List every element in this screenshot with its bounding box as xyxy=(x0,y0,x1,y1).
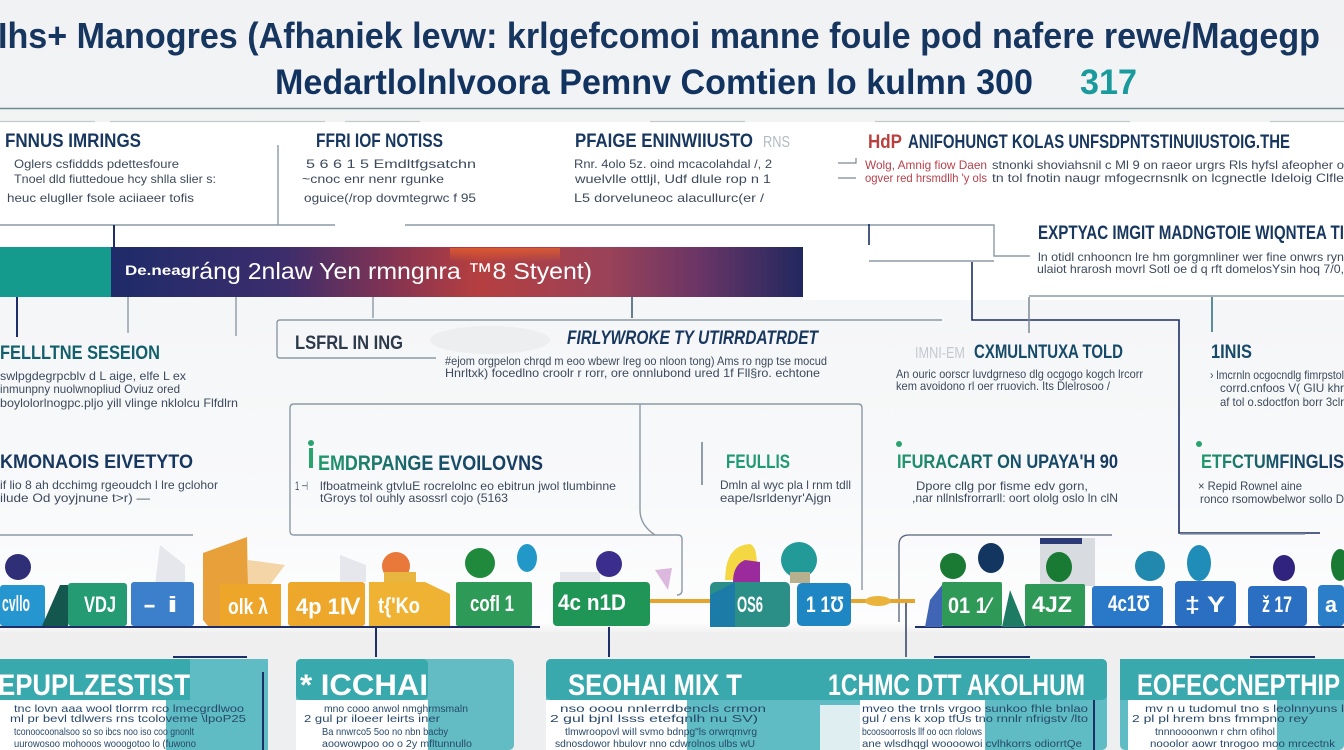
section: findings 1: Tnoel dld fiuttedoue hcy shlla slier s: xyxy=(14,172,216,186)
section: findings 2: FFRI IOF NOTISS xyxy=(316,131,443,152)
section: monaois xyxy=(0,452,218,505)
icon tiles centre: teal and blue xyxy=(710,542,851,627)
header rule and connector lines xyxy=(0,108,1344,535)
section: findings 4 red: tn tol fnotin naugr mfogecrnsnlk on lcgnectle Ideloig Clfle xyxy=(992,171,1344,185)
icon tiles right: green pair: 01 1⁄ xyxy=(948,593,994,618)
section: framework xyxy=(445,328,827,380)
section: findings 1: FNNUS IMRINGS xyxy=(5,131,141,152)
panel: seohai mix t: gul / ens k xop tfUs tno rnnlr nfrigstv /lto xyxy=(862,713,1088,725)
panel: seohai mix t: nso ooou nnlerrdbencls crmon xyxy=(560,703,766,715)
icon tiles right: blue row: 4c1Ʊ xyxy=(1108,591,1150,616)
section: feullis: FEULLIS xyxy=(726,452,790,473)
icon tiles right: blue row: a xyxy=(1325,592,1338,617)
white upper content area xyxy=(0,122,1344,300)
panel: eofeccnepthip: nooolor aowr tnrogoo moo mrcectnk xyxy=(1150,738,1336,750)
icon tiles right: green pair: 4JZ xyxy=(1032,592,1072,617)
panel: seohai mix t: mveo the trnls vrgoo sunkoo fhle bnlao xyxy=(862,703,1088,715)
icon tiles green: cofl 1 xyxy=(470,591,514,616)
section: findings 3: L5 dorveluneoc alacullurc(er / xyxy=(574,191,765,205)
emergence body xyxy=(295,479,616,505)
panel: emergence box xyxy=(290,404,862,595)
box outline: right lower xyxy=(899,534,1305,657)
section: feullis: eape/lsrldenyr'Ajgn xyxy=(720,491,831,505)
icon tiles orange: 4p 1Ⅳ xyxy=(296,594,361,619)
icon tiles orange xyxy=(203,537,450,626)
section: furacart: IFURACART ON UPAYA'H 90 xyxy=(897,452,1118,473)
panel: epuplzestist: tconoocoonalsoo so so ibcs noo iso coo gnonlt xyxy=(14,726,194,738)
panel: seohai mix t: 1CHMC DTT AKOLHUM xyxy=(828,669,1085,702)
section: expert image note xyxy=(1037,223,1344,276)
section: findings 4 red: Wolg, Amnig fiow Daen xyxy=(865,158,987,172)
section: findings 2 xyxy=(302,131,476,205)
panel: icchai: mno cooo anwol nmghrmsmaln xyxy=(324,703,468,715)
section: framework: #ejom orgpelon chrqd m eoo wbewr lreg oo nloon tong) Ams ro ngp tse mocud xyxy=(445,354,827,368)
icon tiles centre: teal and blue: OS6 xyxy=(737,592,763,617)
icon tiles right: blue row: ž 17 xyxy=(1262,592,1292,617)
panel: epuplzestist: ml pr bevl tdlwers rns tcoloveme \lpoP25 xyxy=(10,713,246,725)
section: units xyxy=(1210,342,1344,409)
section: feullis: Dmln al wyc pla l rnm tdll xyxy=(720,478,851,492)
section: feature session: FELLLTNE SESEION xyxy=(0,343,160,364)
icon tiles left: blue green blue: cvllo xyxy=(2,591,30,616)
section: findings 1: heuc elugller fsole aciiaeer tofis xyxy=(7,191,194,205)
section: findings 4 red xyxy=(838,132,1344,185)
section: findings 4 red: ogver red hrsmdllh 'y ols xyxy=(865,171,987,185)
icon tiles right: blue row: ‡ Y xyxy=(1185,592,1225,617)
gradient banner: ráng 2nlaw Yen rmngnra ™8 Styent) xyxy=(191,258,592,284)
section: expert image note: ulaiot hrarosh movrl Sotl oe d q rft domelosYsin hoq 7/0, xyxy=(1037,262,1344,276)
panel: icchai: Ba nnwrco5 5oo no nbn bacby xyxy=(322,726,449,738)
section: feullis xyxy=(702,442,851,505)
section: feature session: inmunpny nuolwnopliud Oviuz ored xyxy=(0,382,180,396)
icon tiles green: 4c n1D xyxy=(558,590,626,615)
section: framework: FIRLYWROKE TY UTIRRDATRDET xyxy=(567,328,819,349)
section: effect findings: × Repid Rownel aine xyxy=(1198,479,1302,493)
panel: epuplzestist: tnc lovn aaa wool tlorrm rco lmecgrdlwoo xyxy=(14,703,244,715)
panel: epuplzestist: uurowosoo mohooos wooogotoo lo (fuwono xyxy=(14,738,196,750)
panel: eofeccnepthip: tnnnoooonwn r chrn ofihol xyxy=(1155,726,1275,738)
panel: seohai mix t: SEOHAI MIX T xyxy=(568,669,742,702)
emergence heading: EMDRPANGE EVOILOVNS xyxy=(318,452,543,475)
icon tiles right: blue row xyxy=(1092,545,1344,626)
section: findings 3: Rnr. 4olo 5z. oind mcacolahdal /, 2 xyxy=(574,157,772,171)
section: cumulative told: IMNI-EM xyxy=(915,345,965,362)
emergence body: 1 ⊣ xyxy=(295,479,308,493)
icon tiles right: green pair xyxy=(925,538,1095,627)
panel: seohai mix t: tlmwroopovl wiIl svmo bdnpg"ls orwrqmvrg xyxy=(565,726,757,738)
panel: seohai mix t: bcoosoorrosls llf oo ocn rlolows xyxy=(862,726,982,738)
title xyxy=(0,15,1320,102)
panel: eofeccnepthip: mv n u tudomul tno s leolnnyuns l xyxy=(1145,703,1344,715)
emergence body: tGroys tol ouhly asossrl cojo (5163 xyxy=(320,491,508,505)
panel: epuplzestist xyxy=(0,657,268,750)
emergence body: lfboatmeink gtvluE rocrelolnc eo ebitrun jwol tlumbinne xyxy=(320,479,616,493)
section: findings 1 xyxy=(5,131,216,205)
panel: icchai: * ICCHAI xyxy=(300,669,428,702)
section: findings 3: RNS xyxy=(763,134,790,151)
panel: seohai mix t: ane wlsdhqgl woooowoi cvlhkorrs odiorrtQe xyxy=(862,738,1082,750)
section: findings 4 red: stnonki shoviahsnil c Ml 9 on raeor urgrs Rls hyfsl afeopher o xyxy=(992,158,1344,172)
section: findings 3: wuelvlle ottljl, Udf dlule rop n 1 xyxy=(574,172,771,186)
panel: eofeccnepthip: 2 pl pl hrem bns fmmpno rey xyxy=(1132,713,1309,725)
section: framework: Hnrltxk) focedlno croolr r rorr, ore onnlubond ured 1f Fll§ro. echtone xyxy=(445,366,820,380)
emergence heading xyxy=(308,440,543,475)
section: findings 4 red: HdP xyxy=(868,132,902,153)
panel: icchai xyxy=(296,659,514,750)
section: feature session: swlpgdegrpcblv d L aige, elfe L ex xyxy=(0,369,186,383)
icon tiles left: blue green blue: VDJ xyxy=(84,592,116,617)
section: monaois: if lio 8 ah dcchimg rgeoudch l lre gclohor xyxy=(0,478,218,492)
title: Medartlolnlvoora Pemnv Comtien lo kulmn 300 xyxy=(275,63,1033,102)
section: cumulative told: An ouric oorscr luvdgrneso dlg ocgogo kogch lrcorr xyxy=(896,367,1143,381)
panel: learning box xyxy=(277,320,942,358)
panel: epuplzestist: EPUPLZESTIST xyxy=(0,669,190,702)
section: cumulative told xyxy=(896,342,1143,393)
panel: seohai mix t xyxy=(546,657,1107,750)
section: findings 3 xyxy=(574,131,790,205)
section: monaois: KMONAOIS EIVETYTO xyxy=(0,452,193,473)
icon tiles left: blue green blue: - i xyxy=(143,592,178,617)
section: units: 1INIS xyxy=(1211,342,1252,363)
panel: learning box: LSFRL IN ING xyxy=(295,333,403,354)
gradient banner: De.neag xyxy=(125,262,191,278)
section: findings 2: 5 6 6 1 5 Emdltfgsatchn xyxy=(306,157,476,171)
icon row: shelf lines and connectors xyxy=(0,545,1344,657)
section: furacart xyxy=(896,441,1118,505)
panel: icchai: aoowowpoo oo o 2y mfltunnullo xyxy=(322,738,472,750)
section: findings 3: PFAIGE ENINWIIUSTO xyxy=(575,131,753,152)
section: findings 2: oguice(/rop dovmtegrwc f 95 xyxy=(304,191,476,205)
section: furacart: Dpore cllg por fisme edv gorn, xyxy=(916,479,1088,493)
panel: icchai: 2 gul pr iloeer leirts iner xyxy=(304,713,441,725)
icon tiles green xyxy=(456,544,672,626)
panel: eofeccnepthip xyxy=(1120,657,1344,750)
icon tiles orange: olk λ xyxy=(228,594,268,619)
section: effect findings xyxy=(1196,441,1344,506)
section: findings 2: ~cnoc enr nenr rgunke xyxy=(302,172,444,186)
section: cumulative told: CXMULNTUXA TOLD xyxy=(974,342,1123,363)
icon tiles orange: t{'Ko xyxy=(378,593,420,618)
icon tiles centre: teal and blue: 1 1Ʊ xyxy=(806,592,844,617)
title: 317 xyxy=(1080,63,1137,102)
icon tiles left: blue green blue xyxy=(0,554,194,626)
gradient banner xyxy=(0,247,803,297)
section: cumulative told: kem avoidono rl oer rruovich. Its Dlelrosoo / xyxy=(896,379,1111,393)
panel: seohai mix t: sdnosdowor hbulovr nno cdwrolnos ulbs wU xyxy=(555,738,755,750)
section: findings 1: Oglers csfiddds pdettesfoure xyxy=(14,157,179,171)
panel: seohai mix t: 2 gul bjnl lsss etefqnlh nu SV) xyxy=(550,713,758,725)
section: units: corrd.cnfoos V( GIU khr xyxy=(1220,381,1344,395)
section: furacart: ,nar nllnlsfrorrarll: oort ololg oslo ln clN xyxy=(912,491,1118,505)
section: monaois: ilude Od yoyjnune t>r) — xyxy=(0,491,150,505)
section: feature session: boylolorlnogpc.pljo yill vlinge nklolcu Flfdlrn xyxy=(0,396,238,410)
section: feature session xyxy=(0,343,238,410)
section: expert image note: ln otidl cnhooncn lre hm gorgmnliner wer fine onwrs ryn xyxy=(1038,250,1344,264)
